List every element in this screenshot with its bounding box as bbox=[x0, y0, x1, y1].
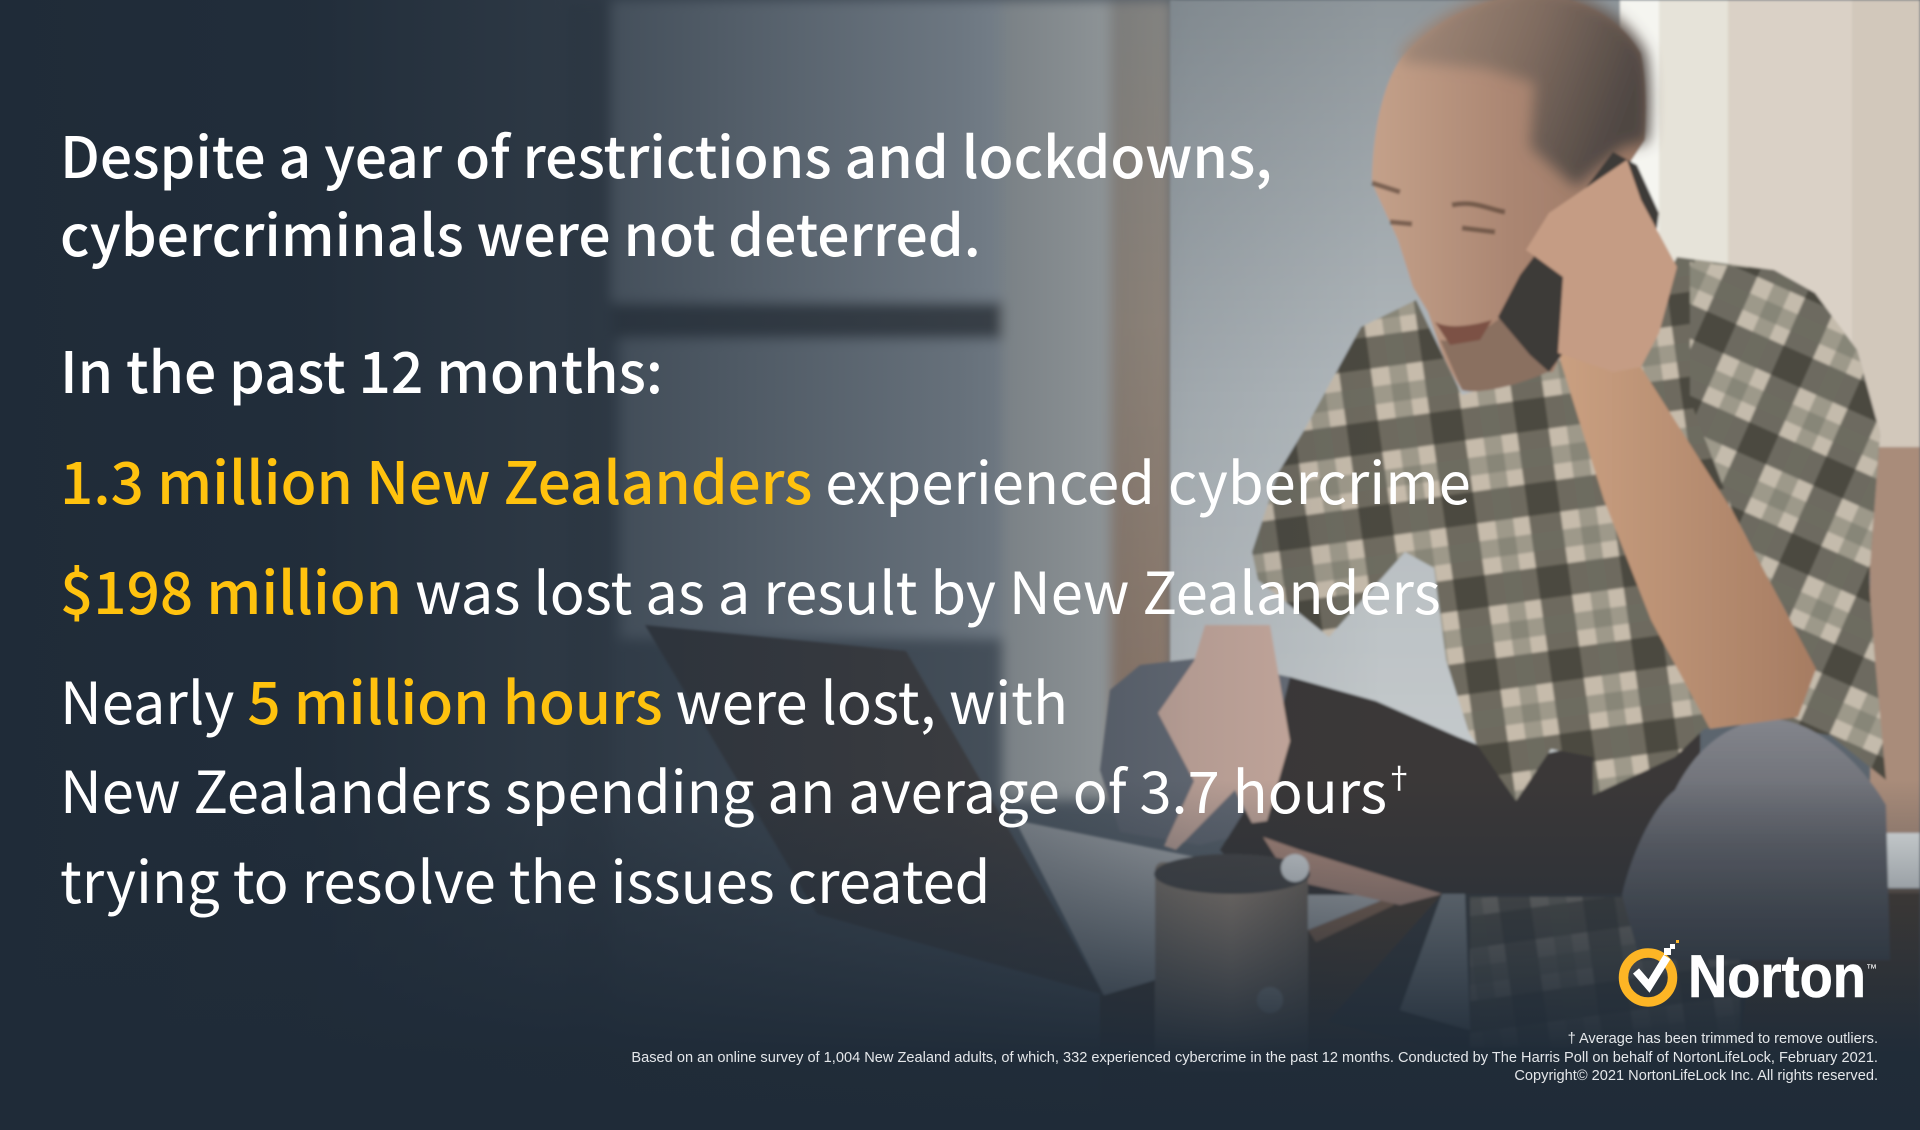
heading: intro statement bbox=[60, 113, 1272, 273]
subheading: In the past 12 months: bbox=[60, 328, 663, 410]
Norton logo: ™ bbox=[1866, 963, 1877, 975]
right knee bbox=[1622, 719, 1890, 960]
hair bbox=[1400, 0, 1650, 187]
sleeve bbox=[1690, 262, 1886, 780]
phone bbox=[1498, 152, 1659, 372]
stat: money lost: $198 million was lost as a result by New Zealanders bbox=[60, 546, 1441, 631]
stat: hours lost: † bbox=[1384, 754, 1414, 798]
eyebrows, eyes, mouth bbox=[1372, 183, 1505, 232]
stat: hours lost: trying to resolve the issues created bbox=[60, 836, 990, 920]
Norton logo bbox=[1624, 940, 1877, 1010]
tablet with reflection bbox=[1327, 894, 1760, 1060]
stat: hours lost: New Zealanders spending an average of 3.7 hours bbox=[60, 746, 1387, 830]
wall and window bbox=[1170, 0, 1630, 800]
heading: intro statement: Despite a year of restrictions and lockdowns, bbox=[60, 113, 1272, 195]
stat: people affected: 1.3 million New Zealanders experienced cybercrime bbox=[60, 436, 1471, 521]
beard bbox=[1440, 300, 1552, 391]
Norton logo: Norton bbox=[1688, 943, 1866, 1010]
dark pants bbox=[1220, 677, 1700, 895]
hand on phone bbox=[1526, 160, 1677, 372]
stat: hours lost bbox=[60, 656, 1414, 920]
footnotes: † Average has been trimmed to remove outliers. bbox=[1568, 1031, 1878, 1047]
left knee bbox=[1100, 658, 1290, 845]
right hand under glass bbox=[1263, 837, 1442, 905]
laptop lid bbox=[645, 625, 1104, 995]
forearm bbox=[1558, 353, 1816, 729]
left hand pointing bbox=[1158, 625, 1290, 850]
head bbox=[1372, 0, 1646, 391]
stat: hours lost: Nearly 5 million hours were lost, with bbox=[60, 656, 1068, 741]
footnotes bbox=[631, 1031, 1878, 1084]
heading: intro statement: cybercriminals were not deterred. bbox=[60, 191, 981, 273]
laptop base bbox=[1015, 820, 1390, 995]
glass bbox=[1155, 862, 1308, 1072]
table bbox=[1100, 893, 1920, 1130]
footnotes: Copyright© 2021 NortonLifeLock Inc. All rights reserved. bbox=[1514, 1068, 1878, 1084]
footnotes: Based on an online survey of 1,004 New Zealand adults, of which, 332 experienced cybercrime in the past 12 months. Conducted by The Harris Poll on behalf of NortonLifeLock, February 2021. bbox=[631, 1050, 1878, 1066]
shirt bbox=[1252, 257, 1880, 801]
